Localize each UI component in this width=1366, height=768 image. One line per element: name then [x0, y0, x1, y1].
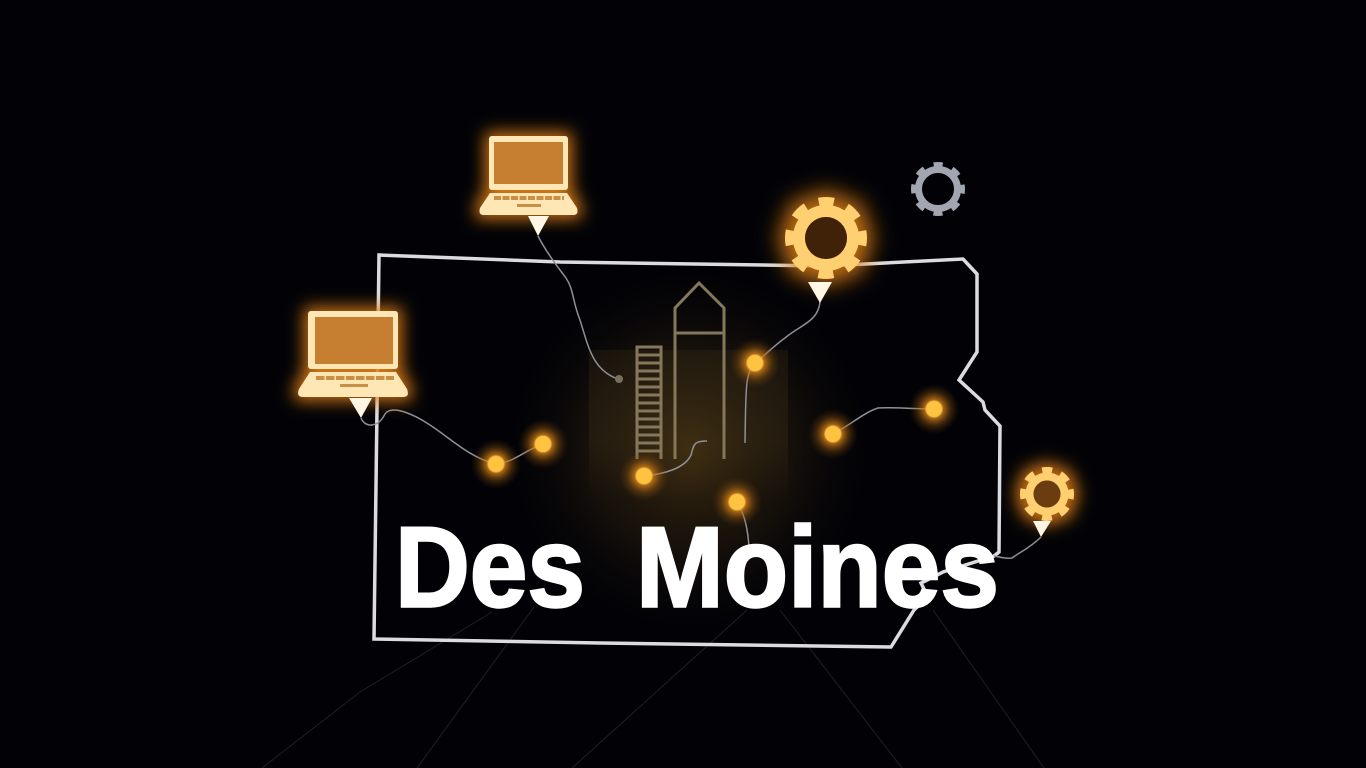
central glow [480, 260, 900, 640]
ladder building [637, 347, 661, 459]
building backdrop panel [589, 350, 788, 500]
pin [808, 282, 832, 303]
icon: laptop top [480, 136, 578, 236]
dot 3 [619, 451, 669, 501]
dot 5 [730, 338, 780, 388]
icon: laptop left [298, 311, 408, 418]
gray endpoint dot [615, 375, 623, 383]
building illustration [589, 283, 788, 500]
pin [528, 216, 549, 236]
icon: gray gear [914, 164, 962, 214]
dot 6 [808, 409, 858, 459]
dot 2 [518, 419, 568, 469]
pin [349, 398, 372, 418]
icon: large gear [790, 202, 862, 303]
dot 1 [471, 439, 521, 489]
faint perspective lines [262, 607, 1044, 768]
gear hole [1034, 480, 1060, 508]
tower building [675, 283, 724, 459]
dot 7 [909, 384, 959, 434]
title: Moines [636, 504, 999, 632]
gear hole [805, 217, 847, 259]
pin [1033, 521, 1051, 537]
state outline map [374, 255, 1000, 647]
dot 4 [712, 477, 762, 527]
title: Des [395, 504, 585, 632]
icon: small gear right [1023, 470, 1071, 537]
title [395, 504, 999, 632]
glowing dots [471, 338, 959, 527]
connector lines [361, 236, 1041, 558]
